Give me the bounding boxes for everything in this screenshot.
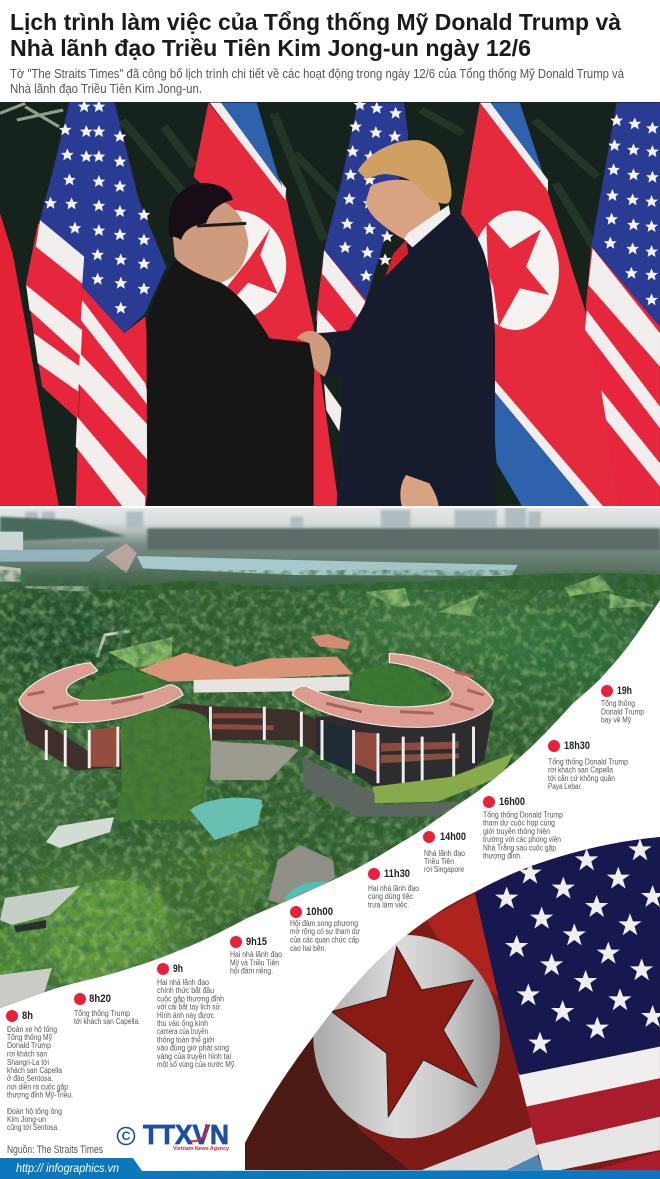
event 11h30: Hai nhà lãnh đạo: [368, 884, 419, 893]
event 11h30: trưa làm việc.: [368, 900, 409, 910]
event 18h30: tới căn cứ không quân: [548, 774, 615, 783]
event 9h: thu vào ống kính: [157, 1019, 208, 1028]
event 9h: một số vùng của nước Mỹ.: [157, 1060, 236, 1069]
lower garden details: [0, 798, 335, 1008]
event 9h15: Hai nhà lãnh đạo: [230, 950, 282, 959]
fourth North Korean flag: [461, 103, 620, 506]
event 9h: thông toàn thế giới: [157, 1036, 214, 1044]
event 9h: với cái bắt tay lịch sử.: [157, 1002, 222, 1012]
event 9h: camera của truyền: [157, 1027, 208, 1036]
event 14h00: 14h00: [440, 831, 466, 843]
event 18h30: Tổng thống Donald Trump: [548, 758, 628, 766]
Kim: [146, 183, 331, 506]
left North Korean flag: [0, 213, 59, 506]
title: Nhà lãnh đạo Triều Tiên Kim Jong-un ngày 12/6: [10, 35, 531, 61]
event 19h: Donald Trump: [601, 708, 644, 716]
large foreground tree: [114, 708, 211, 820]
event 18h30: rời khách sạn Capella: [548, 766, 613, 774]
forest: [0, 573, 660, 1020]
event 9h: chính thức bắt đầu: [157, 986, 214, 995]
title: Lịch trình làm việc của Tổng thống Mỹ Donald Trump và: [10, 9, 621, 35]
right US flag: [585, 103, 660, 506]
event 8h: thượng đỉnh Mỹ-Triều.: [7, 1090, 73, 1100]
city skyline and water: [0, 508, 660, 592]
event 9h: [157, 963, 236, 1069]
event 18h30: [548, 740, 628, 791]
intro text: Nhà lãnh đạo Triều Tiên Kim Jong-un.: [10, 81, 202, 96]
event 9h: vàng của truyền hình tại: [157, 1052, 231, 1061]
event 8h: Shangri-La tới: [7, 1058, 49, 1067]
event 8h: rời khách sạn: [7, 1050, 47, 1058]
event 8h: Tổng thống Mỹ: [7, 1033, 52, 1042]
courtyard trees: [349, 665, 442, 707]
right wing facade: [316, 710, 493, 787]
event 8h20: Tổng thống Trump: [74, 1009, 130, 1018]
intro text: [10, 66, 625, 96]
event 9h: vào đúng giờ phát sóng: [157, 1044, 229, 1052]
left wing facade: [19, 703, 318, 771]
hotel roof left: [19, 663, 183, 723]
event 9h15: [230, 936, 282, 976]
event 14h00: Triều Tiên: [424, 857, 454, 866]
event 19h: [601, 685, 644, 724]
event 16h00: Tổng thống Donald Trump: [483, 810, 563, 820]
event 9h: 9h: [173, 963, 183, 975]
event 9h15: Mỹ và Triều Tiên: [230, 958, 279, 968]
first US flag: [26, 100, 166, 506]
event 10h00: 10h00: [306, 906, 333, 918]
event 11h30: cùng dùng tiệc: [368, 892, 413, 901]
event 8h: Đoàn hộ tống ông: [7, 1107, 62, 1116]
event 10h00: mở rộng có sự tham dự: [290, 927, 361, 936]
event 16h00: thượng đỉnh.: [483, 852, 522, 860]
event 14h00: rời Singapore: [424, 865, 464, 874]
TTXVN logo: [118, 1119, 229, 1152]
event 16h00: trường với các phóng viên: [483, 835, 561, 844]
TTXVN logo: TTXVN: [143, 1119, 229, 1150]
event 16h00: 16h00: [499, 796, 525, 808]
event 16h00: Nhà Trắng sau cuộc gặp: [483, 844, 556, 852]
photo: North Korean and US flags close-up: [240, 830, 660, 1173]
event 10h00: cao hai bên.: [290, 944, 326, 953]
event 10h00: Hội đàm song phương: [290, 919, 358, 928]
second North Korean flag: [177, 103, 339, 506]
photo: leaders shaking hands in front of flags: [0, 98, 660, 506]
event 14h00: [423, 831, 466, 874]
event 11h30: [368, 868, 419, 910]
event 19h: Tổng thống: [601, 699, 635, 708]
event 16h00: tham dự cuộc họp cùng: [483, 818, 555, 828]
US flag stripes: [518, 1045, 660, 1173]
footer bar: [0, 1158, 660, 1179]
event 8h20: 8h20: [89, 993, 111, 1005]
third US flag: [316, 98, 408, 432]
website url: http:// infographics.vn: [16, 1161, 119, 1175]
event 8h: Donald Trump: [7, 1041, 51, 1050]
event 8h: ở đảo Sentosa,: [7, 1074, 53, 1083]
event 10h00: [290, 906, 361, 953]
event 8h: Kim Jong-un: [7, 1115, 46, 1124]
event 18h30: Paya Lebar.: [548, 782, 582, 791]
North Korean emblem: [313, 935, 500, 1138]
lower garden trees: [0, 838, 270, 985]
upper pool: [260, 804, 263, 812]
event 8h: khách sạn Capella: [7, 1066, 62, 1075]
event 9h: Hai nhà lãnh đạo: [157, 978, 209, 987]
event 16h00: [483, 796, 563, 860]
timeline: [6, 685, 644, 1132]
event 8h: nơi diễn ra cuộc gặp: [7, 1082, 68, 1092]
event 9h15: 9h15: [246, 936, 267, 948]
Trump: [324, 140, 495, 506]
title: [10, 9, 621, 61]
event 8h: [6, 1010, 73, 1132]
event 16h00: giới truyền thông hiện: [483, 827, 550, 836]
roof hatches: [27, 672, 484, 713]
event 8h: cũng tới Sentosa.: [7, 1123, 59, 1132]
photo: Capella hotel aerial view: [0, 507, 660, 1020]
source: Nguồn: The Straits Times: [7, 1144, 103, 1156]
event 8h: Đoàn xe hộ tống: [7, 1025, 57, 1034]
main colonial building: [139, 653, 353, 693]
event 8h20: tới khách sạn Capella.: [74, 1017, 140, 1026]
event 14h00: Nhà lãnh đạo: [424, 849, 465, 858]
TTXVN logo: Vietnam News Agency: [173, 1146, 229, 1152]
US flag canton with stars: [475, 830, 660, 1075]
event 9h: cuộc gặp thượng đỉnh: [157, 994, 224, 1004]
event 9h: Hình ảnh này được: [157, 1011, 214, 1020]
event 19h: 19h: [617, 685, 632, 697]
event 8h: 8h: [22, 1010, 33, 1022]
event 8h20: [74, 993, 140, 1026]
event 9h15: hội đàm riêng.: [230, 966, 273, 976]
TTXVN logo: C: [122, 1129, 131, 1143]
event 19h: bay về Mỹ: [601, 716, 631, 724]
event 10h00: của các quan chức cấp: [290, 936, 359, 944]
event 18h30: 18h30: [564, 740, 590, 752]
hotel roof right: [293, 653, 493, 727]
event 11h30: 11h30: [384, 868, 410, 880]
